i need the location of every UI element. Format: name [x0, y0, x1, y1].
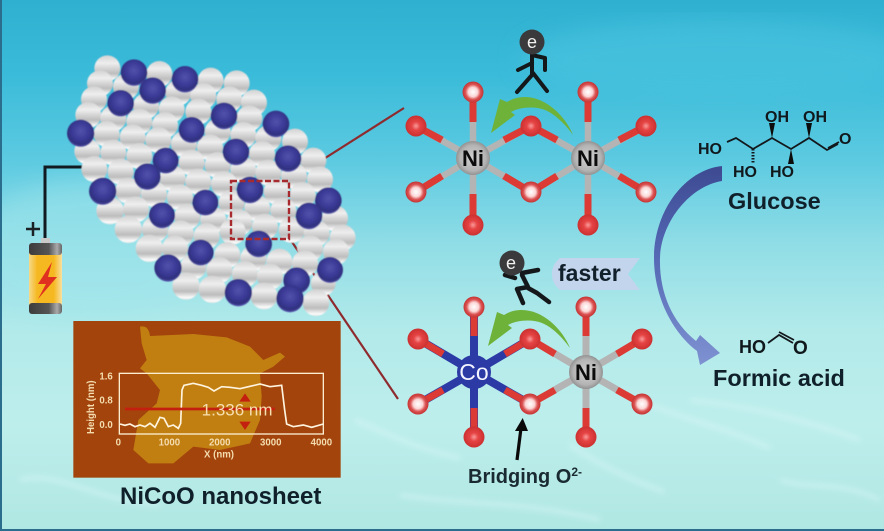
axis labels: Height (nm): [86, 380, 97, 434]
Co-O-Ni structure: [408, 296, 652, 448]
glucose structure: HO: [770, 164, 794, 181]
axis labels: 3000: [260, 437, 281, 448]
axis labels: 0.0: [99, 420, 113, 431]
glucose structure: HO: [698, 141, 722, 158]
formic acid structure: HO: [739, 337, 766, 357]
connector lines to zoomed structures: [289, 108, 404, 399]
label: faster: faster: [558, 260, 621, 286]
arrow: bridging oxygen pointer: [515, 418, 528, 460]
measured height marker: [125, 405, 275, 413]
Co-O-Ni structure: Ni: [575, 360, 597, 385]
icon: running electron: e: [506, 253, 516, 273]
axis labels: 1.6: [99, 371, 113, 382]
AFM image with height profile: [73, 321, 341, 478]
height profile trace: [120, 383, 323, 428]
glucose structure: HO: [733, 164, 757, 181]
glucose structure: O: [839, 131, 851, 148]
curved conversion arrow: [654, 166, 722, 365]
glucose structure: [698, 109, 851, 181]
Ni-O-Ni structure: Ni: [462, 146, 484, 171]
axis labels: 1000: [159, 437, 180, 448]
icon: running electron: [500, 250, 549, 303]
axis labels: [86, 371, 332, 461]
Ni-O-Ni structure: [406, 82, 656, 236]
axis labels: 0.8: [99, 396, 113, 407]
axis labels: 4000: [311, 437, 332, 448]
Co-O-Ni structure: Co: [459, 359, 489, 385]
formic acid structure: [739, 332, 808, 359]
label: Bridging O2-: 2-: [571, 465, 582, 479]
label: Formic acid: Formic acid: [713, 365, 845, 391]
Ni-O-Ni structure: Ni: [577, 146, 599, 171]
green arrow: bottom: [488, 310, 570, 348]
glucose structure: OH: [765, 109, 789, 126]
height label: 1.336 nm: [202, 401, 272, 420]
nanosheet flake: [133, 326, 285, 463]
NiCoO atom sheet: [67, 55, 356, 316]
icon: walking electron: e: [527, 32, 537, 52]
axis labels: 2000: [209, 437, 230, 448]
axis labels: X (nm): [204, 450, 234, 461]
icon: walking electron: [517, 30, 547, 92]
label: Bridging O2-: Bridging O: [468, 466, 571, 488]
green arrow: top: [491, 97, 573, 135]
glucose structure: OH: [803, 109, 827, 126]
label: Glucose: Glucose: [728, 188, 821, 214]
battery with wire: [26, 167, 85, 314]
formic acid structure: O: [793, 338, 808, 359]
profile frame: [119, 373, 323, 434]
dashed selection square: [231, 181, 289, 239]
label: faster: [552, 258, 640, 290]
axis labels: 0: [116, 437, 121, 448]
caption: NiCoO nanosheet: NiCoO nanosheet: [120, 483, 321, 510]
